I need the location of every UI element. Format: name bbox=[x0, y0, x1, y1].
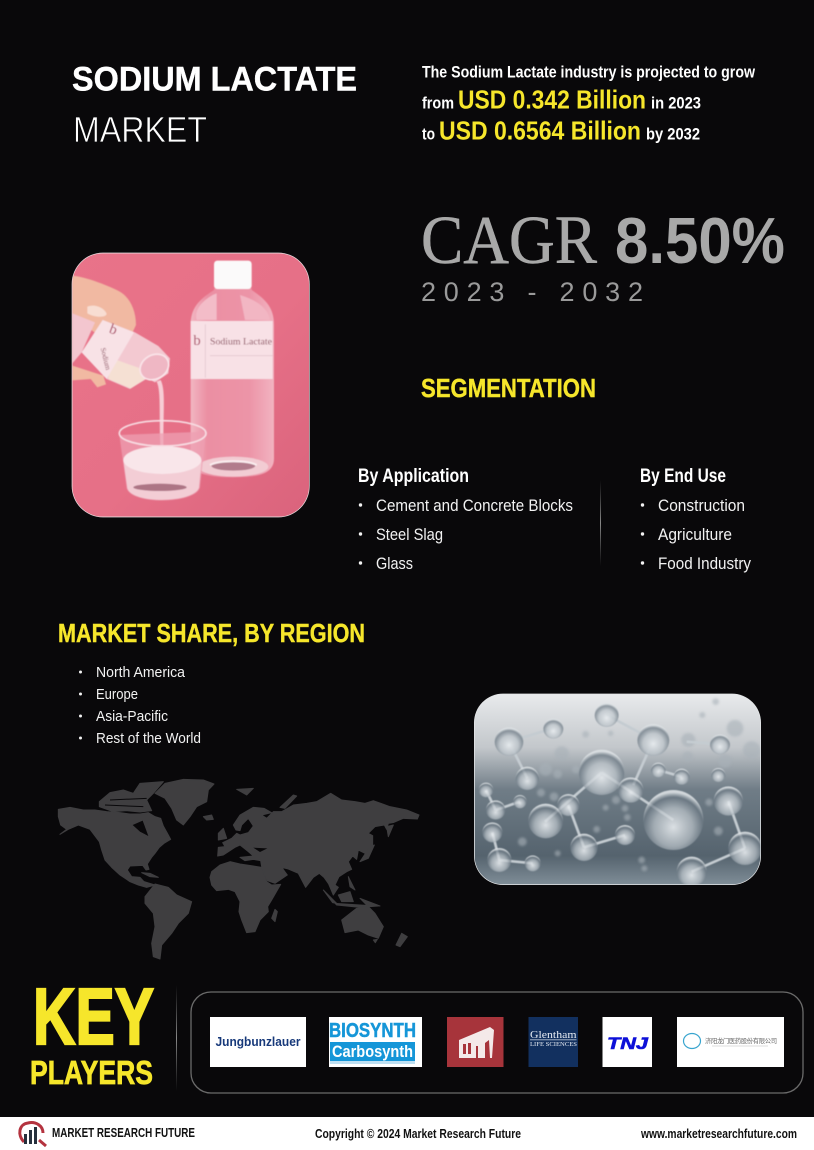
logo: Glentham Life Sciences: Glentham bbox=[530, 1029, 577, 1041]
icon: market research future logo bbox=[20, 1123, 46, 1146]
projection text bbox=[422, 64, 755, 146]
projection text: The Sodium Lactate industry is projected to grow bbox=[422, 64, 755, 82]
projection text: USD 0.342 Billion bbox=[458, 84, 646, 114]
CAGR figure: 2023 - 2032 bbox=[421, 277, 643, 307]
icon: large bottle bbox=[191, 261, 274, 477]
logo: Glentham Life Sciences: LIFE SCIENCES bbox=[530, 1041, 577, 1048]
logo: Biosynth Carbosynth bbox=[329, 1017, 422, 1067]
world map bbox=[58, 779, 419, 959]
icon: glass bbox=[119, 421, 206, 501]
molecule bonds bbox=[486, 715, 745, 872]
logo: Jungbunzlauer bbox=[210, 1017, 306, 1067]
photo: molecules bbox=[474, 694, 762, 887]
logo: TNJ bbox=[602, 1017, 652, 1067]
footer bar: Copyright © 2024 Market Research Future bbox=[315, 1127, 521, 1141]
footer bar bbox=[0, 1117, 814, 1150]
projection text: from bbox=[422, 94, 454, 112]
region list: Rest of the World bbox=[96, 730, 201, 747]
title bbox=[72, 60, 357, 150]
projection text: to bbox=[422, 126, 435, 144]
projection text: in 2023 bbox=[651, 94, 701, 112]
logo: Biosynth Carbosynth: BIOSYNTH bbox=[329, 1020, 416, 1042]
panel: key player logos bbox=[191, 992, 803, 1093]
segmentation list: by end use: Construction bbox=[658, 496, 745, 515]
icon: large bottle: Sodium Lactate bbox=[210, 337, 272, 347]
CAGR figure: 8.50% bbox=[615, 204, 785, 277]
icon: tilted bottle bbox=[72, 313, 173, 389]
logo: Biosynth Carbosynth: Carbosynth bbox=[332, 1042, 413, 1061]
CAGR figure: CAGR bbox=[421, 202, 597, 278]
logo: Longmen pharmaceutical bbox=[677, 1017, 784, 1067]
icon: tilted bottle: b bbox=[107, 321, 119, 339]
key players heading: PLAYERS bbox=[30, 1054, 153, 1091]
segmentation list: by application: Steel Slag bbox=[376, 525, 443, 544]
icon: liquid stream bbox=[157, 380, 164, 458]
title: SODIUM LACTATE bbox=[72, 60, 357, 98]
icon: tilted bottle: Sodium bbox=[99, 347, 113, 371]
heading: segmentation: SEGMENTATION bbox=[421, 373, 596, 403]
segmentation list: by end use: By End Use bbox=[640, 465, 726, 487]
projection text: USD 0.6564 Billion bbox=[439, 116, 641, 146]
molecule spheres bbox=[479, 703, 762, 887]
title: MARKET bbox=[73, 109, 207, 150]
logo: Jungbunzlauer: Jungbunzlauer bbox=[216, 1034, 300, 1049]
heading: market share by region: MARKET SHARE, BY REGION bbox=[58, 618, 365, 648]
segmentation list: by application bbox=[358, 465, 573, 573]
icon: hand bbox=[72, 276, 136, 387]
region list: Europe bbox=[96, 686, 138, 703]
region list bbox=[79, 664, 201, 747]
segmentation list: by end use bbox=[640, 465, 751, 573]
segmentation list: by end use: Agriculture bbox=[658, 525, 732, 544]
logo: Glentham Life Sciences bbox=[528, 1017, 578, 1067]
photo: pouring sodium lactate bbox=[72, 253, 310, 517]
segmentation list: by end use: Food Industry bbox=[658, 554, 751, 573]
logo: red pump jack bbox=[447, 1017, 504, 1067]
icon: large bottle: b bbox=[193, 333, 201, 349]
region list: Asia-Pacific bbox=[96, 708, 168, 725]
segmentation list: by application: Cement and Concrete Blocks bbox=[376, 496, 573, 515]
projection text: by 2032 bbox=[646, 126, 700, 144]
logo: TNJ: TNJ bbox=[607, 1034, 649, 1053]
footer bar: MARKET RESEARCH FUTURE bbox=[52, 1126, 195, 1140]
region list: North America bbox=[96, 664, 186, 681]
key players heading: KEY bbox=[33, 972, 154, 1061]
logo: Longmen pharmaceutical: 济阳龙门医药股份有限公司 bbox=[705, 1036, 777, 1045]
key players heading bbox=[30, 972, 154, 1091]
segmentation list: by application: By Application bbox=[358, 465, 469, 487]
blurred background spheres bbox=[518, 698, 760, 871]
segmentation list: by application: Glass bbox=[376, 554, 413, 573]
CAGR figure bbox=[421, 202, 785, 307]
